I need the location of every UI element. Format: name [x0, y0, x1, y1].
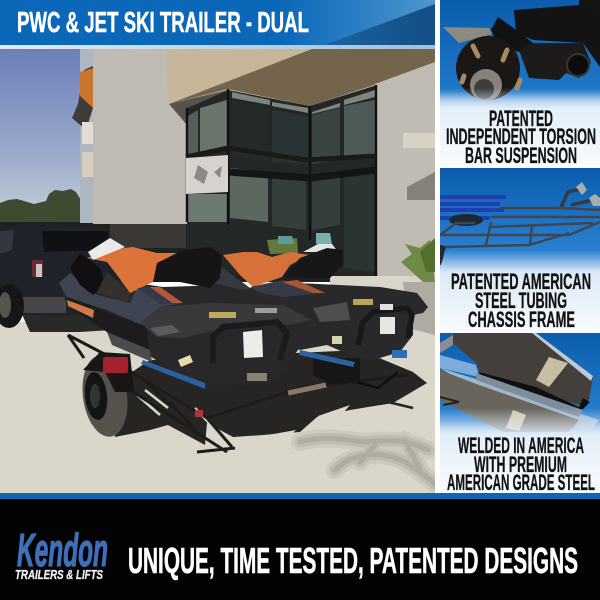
- icon: welded steel seam photo: [440, 333, 600, 438]
- planter and palm: [401, 238, 435, 335]
- front jet ski: [59, 238, 313, 389]
- panel: chassis frame: [440, 168, 600, 332]
- icon: torsion axle hub photo: [440, 0, 600, 112]
- panel text: [447, 433, 595, 495]
- distant trees: [0, 189, 81, 223]
- panel text: [451, 269, 591, 332]
- logo: Kendon Trailers & Lifts: Kendon: [17, 524, 108, 576]
- main photo: jet skis on trailer outside showroom: [0, 49, 435, 493]
- panel: welded steel: [440, 333, 600, 493]
- parked SUV: [0, 222, 112, 328]
- showroom building: [0, 48, 435, 493]
- sign banners on pillar: [72, 66, 93, 177]
- background jet skis: [267, 233, 338, 254]
- ground: [0, 276, 435, 493]
- car shadow: [20, 310, 112, 332]
- ground shadow under trailer: [115, 350, 427, 445]
- bike rack behind: [110, 224, 186, 248]
- footer band: [0, 493, 600, 600]
- rear jet ski: [210, 248, 428, 384]
- panel text: [446, 106, 596, 168]
- sky: [0, 48, 82, 223]
- header banner: [0, 0, 435, 49]
- icon: steel tubing chassis photo: [440, 182, 600, 266]
- dappled tree shade on pavement: [300, 438, 435, 484]
- logo: Kendon Trailers & Lifts: [15, 524, 108, 582]
- panel: torsion suspension: [440, 0, 600, 165]
- logo: Kendon Trailers & Lifts: TRAILERS & LIFTS: [15, 568, 104, 582]
- fender and tail light: [83, 352, 134, 392]
- sidewalk: [330, 276, 435, 336]
- trailer wheel: [78, 352, 132, 440]
- dual jet ski trailer: [68, 335, 408, 452]
- glass storefront: [186, 85, 377, 276]
